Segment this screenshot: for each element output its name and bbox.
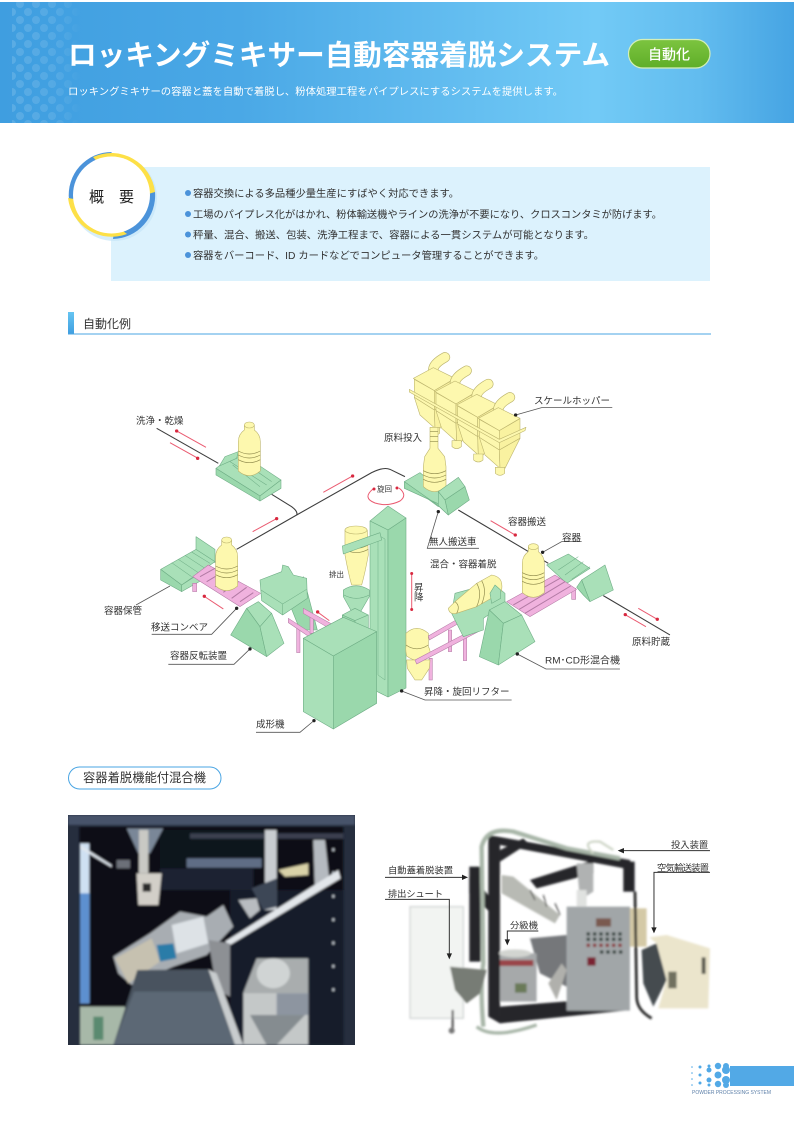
overview badge circle: 要 bbox=[119, 189, 134, 206]
diagram labels: 移送コンベア bbox=[151, 622, 208, 634]
diagram labels: 昇 bbox=[414, 583, 424, 594]
photo labels: 空気輸送装置 bbox=[657, 862, 709, 873]
photo labels: 投入装置 bbox=[671, 839, 708, 850]
station: container storage right bbox=[507, 554, 613, 617]
transfer conveyor left bbox=[193, 537, 261, 607]
photo labels: 排出シュート bbox=[388, 888, 443, 899]
overview badge circle: 概 bbox=[89, 189, 104, 206]
container inverter bbox=[231, 565, 332, 657]
heading: 自動化例 bbox=[68, 312, 711, 334]
header band bbox=[0, 2, 794, 123]
rotation indicator: 旋回: 旋回 bbox=[377, 484, 392, 494]
diagram labels: 容器保管 bbox=[104, 605, 143, 617]
diagram labels bbox=[104, 396, 671, 730]
overview bullet list: 秤量、混合、搬送、包装、洗浄工程まで、容器による一貫システムが可能となります。 bbox=[193, 228, 594, 242]
overview bullet list: 工場のパイプレス化がはかれ、粉体輸送機やラインの洗浄が不要になり、クロスコンタミが防げます。 bbox=[193, 208, 662, 221]
footer logo: POWDER PROCESSING SYSTEM bbox=[692, 1090, 771, 1096]
heading: 容器着脱機能付混合機 bbox=[68, 767, 221, 789]
RM-CD mixer bbox=[448, 575, 505, 637]
diagram labels: 容器 bbox=[562, 532, 582, 544]
panel: overview bbox=[68, 152, 710, 281]
badge: 自動化 bbox=[628, 40, 710, 68]
diagram labels: 原料貯蔵 bbox=[632, 636, 671, 648]
badge: 自動化: 自動化 bbox=[648, 46, 690, 62]
lift arrow bbox=[410, 572, 413, 611]
footer logo bbox=[691, 1063, 794, 1096]
red flow arrows bbox=[170, 429, 659, 627]
discharge vessel on lifter bbox=[342, 526, 382, 635]
diagram labels: 排出 bbox=[329, 569, 344, 579]
mixer base bbox=[479, 544, 544, 665]
station: material charging bbox=[404, 427, 469, 515]
diagram labels: 混合・容器着脱 bbox=[430, 558, 497, 570]
rotation indicator: 旋回 bbox=[368, 484, 404, 505]
diagram labels: 昇降・旋回リフター bbox=[424, 686, 510, 698]
photo: mixer system with labels bbox=[385, 831, 710, 1034]
diagram labels: RM･CD形混合機 bbox=[545, 654, 621, 666]
heading: 容器着脱機能付混合機: 容器着脱機能付混合機 bbox=[83, 770, 206, 785]
station: container storage left bbox=[161, 537, 215, 592]
diagram labels: 原料投入 bbox=[384, 432, 423, 444]
overview bullet list: 容器交換による多品種少量生産にすばやく対応できます。 bbox=[193, 187, 459, 200]
station: washing and drying bbox=[216, 422, 281, 501]
overview bullet list bbox=[185, 187, 662, 262]
rails to lifter bbox=[406, 617, 478, 680]
photo: mixer in black booth bbox=[68, 815, 355, 1045]
diagram labels: 容器搬送 bbox=[508, 516, 547, 528]
molding machine bbox=[303, 617, 377, 729]
title: ロッキングミキサー自動容器着脱システム bbox=[68, 39, 610, 72]
diagram labels: 容器反転装置 bbox=[170, 650, 228, 662]
overview badge circle bbox=[68, 152, 157, 241]
transport wires bbox=[157, 428, 670, 635]
photo labels: 自動蓋着脱装置 bbox=[388, 864, 453, 876]
photo labels bbox=[388, 839, 709, 930]
heading: 自動化例: 自動化例 bbox=[83, 317, 131, 331]
diagram labels: 降 bbox=[414, 592, 424, 604]
overview bullet list: 容器をバーコード、ID カードなどでコンピュータ管理することができます。 bbox=[193, 249, 544, 262]
scale hoppers bbox=[409, 357, 526, 475]
diagram labels: スケールホッパー bbox=[534, 396, 610, 407]
diagram labels: 成形機 bbox=[256, 718, 285, 730]
diagram: automation system bbox=[104, 357, 671, 732]
diagram labels: 無人搬送車 bbox=[429, 536, 477, 548]
subtitle: ロッキングミキサーの容器と蓋を自動で着脱し、粉体処理工程をパイプレスにするシステムを提供します。 bbox=[68, 85, 563, 98]
lifter tower bbox=[370, 506, 406, 697]
diagram labels: 洗浄・乾燥 bbox=[136, 415, 184, 427]
photo labels: 分級機 bbox=[510, 920, 538, 930]
leader lines bbox=[136, 408, 620, 732]
